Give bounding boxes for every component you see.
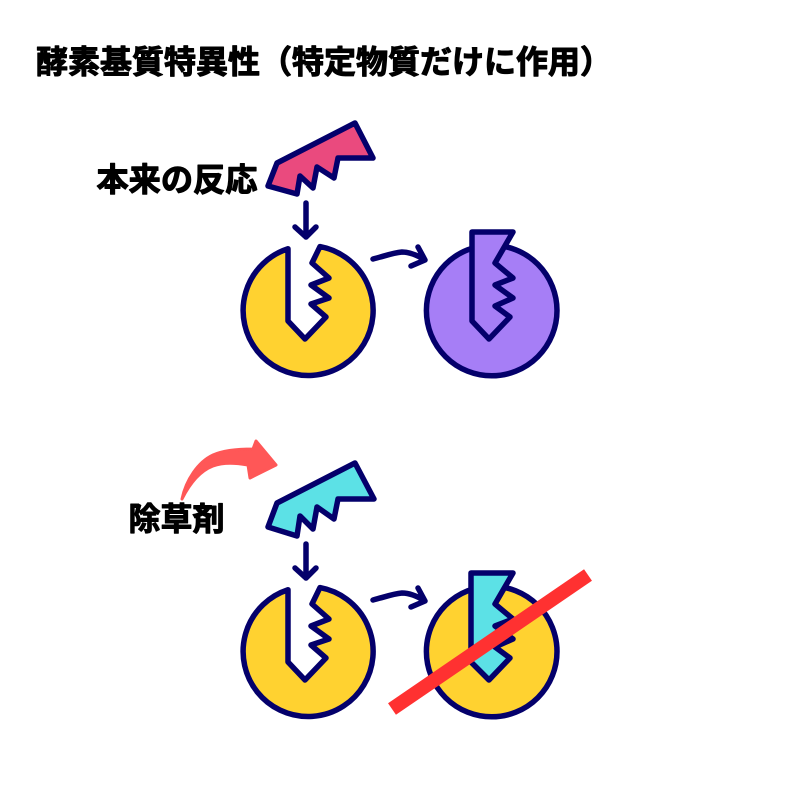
- substrate key: pink: [268, 123, 373, 194]
- label: natural reaction: 本来の反応: [96, 162, 257, 198]
- enzyme: yellow with notch (top): [243, 247, 373, 376]
- arrow: to blocked result (bottom): [373, 588, 425, 607]
- enzyme: yellow with notch (bottom): [243, 588, 373, 717]
- red strike-through line: [392, 575, 588, 709]
- product: purple circle with key: [426, 232, 557, 376]
- arrow: key down to enzyme (bottom): [295, 544, 316, 578]
- title: 酵素基質特異性（特定物質だけに作用）: [36, 44, 612, 80]
- arrow: key down to enzyme (top): [295, 203, 316, 237]
- curved arrow: red: [182, 441, 276, 499]
- blocked enzyme: yellow circle with cyan key: [426, 573, 557, 717]
- inhibitor key: cyan: [268, 463, 374, 536]
- label: herbicide: 除草剤: [128, 501, 225, 537]
- arrow: to product (top): [373, 247, 425, 266]
